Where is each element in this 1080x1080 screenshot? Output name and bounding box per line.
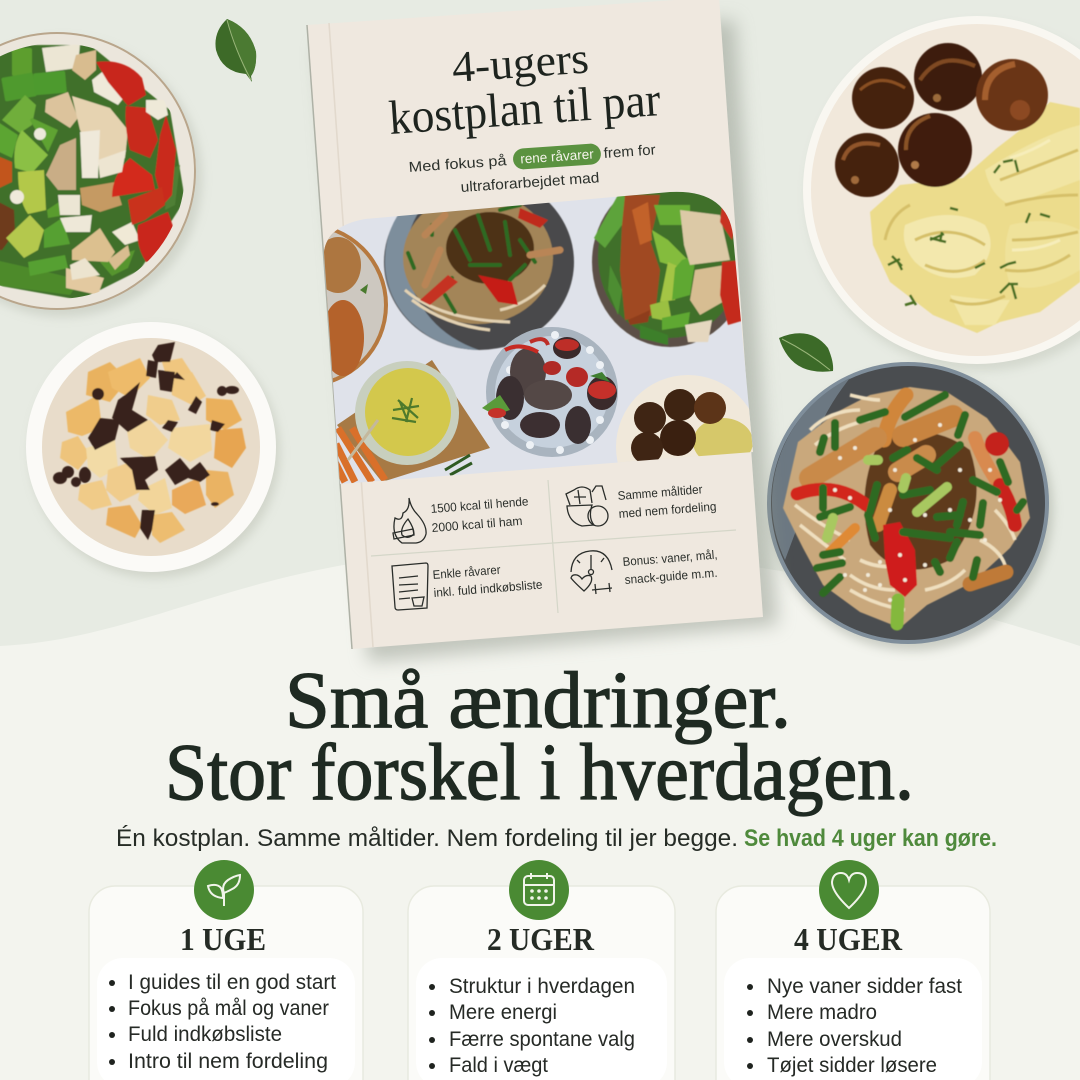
book feature: calories: 2000 kcal til ham [431,514,523,535]
card list [109,970,336,1073]
card list: I guides til en god start [128,970,336,994]
card list: Fald i vægt [449,1053,548,1077]
icon: basil leaf right [779,333,833,372]
subheading: Én kostplan. Samme måltider. Nem fordeling til jer begge. [116,825,738,852]
book feature: shopping list [392,563,543,610]
headline [165,657,914,817]
plate: noodle bowl [767,362,1053,651]
headline: Stor forskel i hverdagen. [165,729,914,817]
dish: meatball plate [616,375,753,462]
card list [429,974,635,1077]
green pill [512,143,602,170]
background lower wave panel [0,551,1080,1080]
card list: Mere overskud [767,1027,902,1051]
card list: Nye vaner sidder fast [767,974,962,998]
book subtitle: Med fokus på [408,153,508,176]
book feature: calories: 1500 kcal til hende [430,494,529,516]
icon: bowl and vegetables [566,486,608,526]
book title [387,34,662,145]
dish: noodle bowl [383,202,575,351]
icon: flame [393,498,426,543]
book shadow [318,20,778,662]
card list: Tøjet sidder løsere [767,1053,937,1077]
book title: 4-ugers [450,34,590,92]
plate: porridge bowl [26,322,280,578]
dish: side plate [324,229,388,382]
icon: basil leaf top [215,19,256,82]
book divider lines [371,480,736,613]
card list [747,974,962,1077]
book feature: bonus [571,548,718,594]
card list: Struktur i hverdagen [449,974,635,998]
subheading: Se hvad 4 uger kan gøre. [744,825,997,852]
book subtitle: ultraforarbejdet mad [460,170,600,196]
headline: Små ændringer. [285,657,791,745]
book subtitle [408,142,656,196]
book feature: shopping list: Enkle råvarer [432,563,501,582]
plate: meatballs and mash [803,16,1080,371]
book title: kostplan til par [387,73,662,145]
card list: Intro til nem fordeling [128,1049,328,1073]
dish: strawberries [482,327,618,457]
book feature: bonus: Bonus: vaner, mål, [622,548,718,569]
panel: 2 uger [408,860,675,1080]
icon: gauge, heart and dumbbell [571,551,612,594]
book feature: bonus: snack-guide m.m. [624,566,718,587]
dish: board and carrots [334,360,490,482]
card title: 4 UGER [794,921,903,957]
card list: Færre spontane valg [449,1027,635,1051]
book feature: shopping list: inkl. fuld indkøbsliste [433,577,543,600]
book feature: same meals [566,482,717,526]
icon: checklist with cart [392,563,428,610]
book photo collage [324,192,753,484]
dish: salad bowl [591,192,741,348]
green pill: rene råvarer [520,146,595,167]
dish: mash bowl [348,361,459,465]
card list: Fuld indkøbsliste [128,1022,282,1046]
icon: calendar [509,860,569,920]
book feature: calories [393,494,529,543]
subheading [116,825,997,852]
panel: 1 uge [89,860,363,1080]
book feature: same meals: med nem fordeling [618,499,717,521]
card title: 2 UGER [487,921,595,957]
book page [307,0,763,649]
panel: 4 uger [716,860,990,1080]
card list: Mere energi [449,1000,557,1024]
icon: heart [819,860,879,920]
book feature: same meals: Samme måltider [617,482,703,503]
icon: sprout [194,860,254,920]
book subtitle: frem for [603,142,656,162]
card list: Mere madro [767,1000,877,1024]
card list: Fokus på mål og vaner [128,996,329,1020]
panel: book cover [306,13,786,670]
card title: 1 UGE [180,921,266,957]
plate: salad bowl top left [0,32,202,317]
